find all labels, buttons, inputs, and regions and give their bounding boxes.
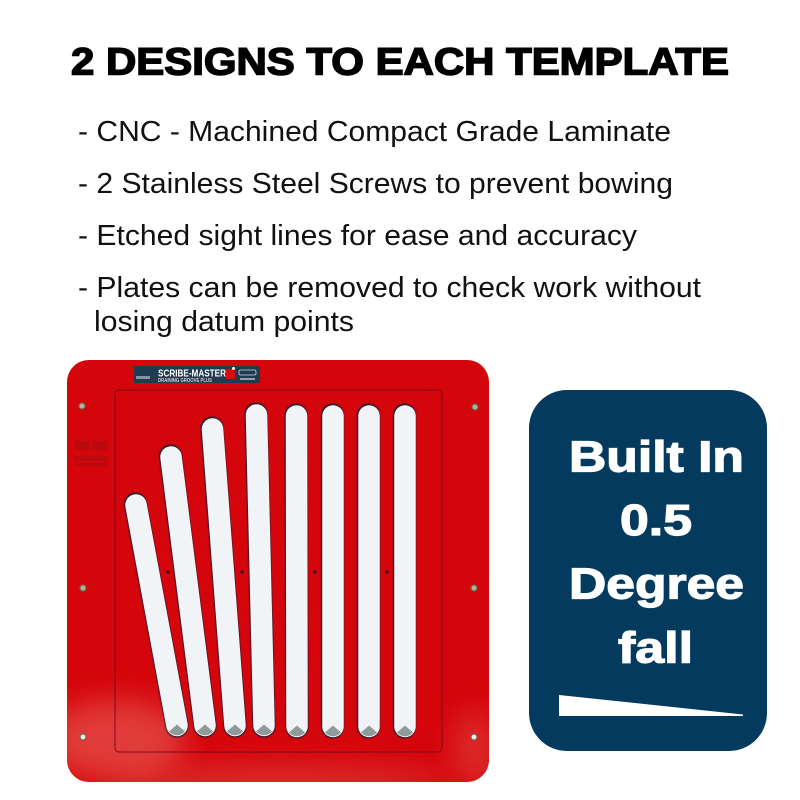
bullet: removable plates xyxy=(78,272,701,338)
callout text xyxy=(569,432,744,672)
callout text: 0.5 xyxy=(620,496,692,545)
plate body xyxy=(67,360,489,782)
inner plate outline xyxy=(115,390,442,752)
callout text: fall xyxy=(618,624,693,672)
bullet: removable plates: - Plates can be removed to check work without xyxy=(78,272,701,304)
slot bottom shading xyxy=(169,724,413,736)
bullet: removable plates: losing datum points xyxy=(94,306,354,338)
white drainage slots xyxy=(136,415,405,726)
callout text: Degree xyxy=(569,560,744,608)
bullet: etched sight lines: - Etched sight lines for ease and accuracy xyxy=(78,220,638,252)
label strip: Scribe-Master: DRAINING GROOVE PLUS xyxy=(158,378,213,384)
callout panel: built-in fall xyxy=(529,390,767,751)
title: 2 DESIGNS TO EACH TEMPLATE xyxy=(71,42,729,84)
bullet: CNC machined: - CNC - Machined Compact Grade Laminate xyxy=(78,116,671,148)
etched marks xyxy=(75,441,108,466)
label strip: Scribe-Master xyxy=(134,366,260,384)
small locating holes xyxy=(166,570,389,574)
screws xyxy=(79,403,478,740)
callout text: Built In xyxy=(569,432,744,482)
bullet: stainless screws: - 2 Stainless Steel Screws to prevent bowing xyxy=(78,168,673,200)
slot outlines xyxy=(136,414,404,727)
feature list xyxy=(78,116,701,338)
icon: fall wedge xyxy=(559,695,743,716)
label strip: Scribe-Master: SCRIBE-MASTER xyxy=(158,368,226,380)
red template plate xyxy=(45,360,497,794)
panel background xyxy=(529,390,767,751)
